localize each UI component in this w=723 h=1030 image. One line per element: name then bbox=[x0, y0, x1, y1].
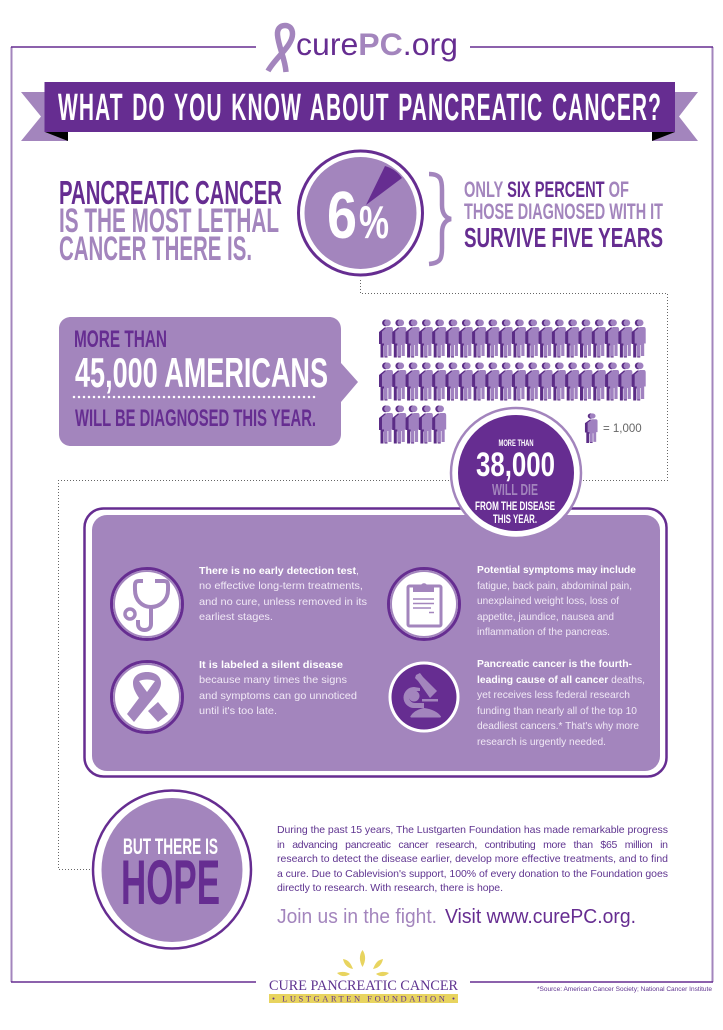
text: silent disease: because many times the signs bbox=[199, 674, 347, 686]
45,000 americans: 45,000 AMERICANS bbox=[75, 349, 328, 396]
text: fourth-leading cause: yet receives less federal research bbox=[477, 689, 630, 701]
foundation paragraph bbox=[277, 824, 668, 894]
45,000 callout bbox=[59, 317, 358, 446]
icon: stethoscope bbox=[112, 568, 182, 640]
text: potential symptoms: inflammation of the pancreas. bbox=[477, 626, 610, 638]
survival statement bbox=[464, 177, 663, 253]
text: fourth-leading cause: funding than nearly all of the top 10 bbox=[477, 705, 637, 717]
but there is: BUT THERE IS bbox=[123, 834, 218, 859]
hope: HOPE bbox=[121, 848, 220, 918]
icon: awareness ribbon logo bbox=[268, 26, 292, 72]
wordmark: CURE PANCREATIC CANCER bbox=[269, 978, 458, 994]
text: no early detection: There is no early detection test, bbox=[199, 565, 359, 577]
text: fourth-leading cause: Pancreatic cancer is the fourth- bbox=[477, 658, 632, 670]
text: silent disease: until it's too late. bbox=[199, 705, 277, 717]
text: fourth-leading cause: leading cause of all cancer deaths, bbox=[477, 674, 645, 686]
banner bar bbox=[44, 82, 675, 132]
pie wedge bbox=[366, 166, 402, 205]
text: fourth-leading cause bbox=[477, 658, 645, 748]
hope circle bbox=[93, 790, 251, 948]
text: potential symptoms: Potential symptoms may include bbox=[477, 564, 636, 576]
microscope arm bbox=[404, 687, 424, 708]
more than: MORE THAN bbox=[74, 326, 167, 353]
cure pancreatic cancer logo bbox=[269, 950, 458, 1004]
survival statement: ONLY SIX PERCENT OF bbox=[464, 177, 629, 202]
pictogram legend: = 1,000 bbox=[603, 423, 642, 435]
text: no early detection: earliest stages. bbox=[199, 611, 273, 623]
text: fourth-leading cause: deadliest cancers.* That's why more bbox=[477, 720, 639, 732]
text: no early detection: no effective long-term treatments, bbox=[199, 580, 363, 592]
diagnosed text: WILL BE DIAGNOSED THIS YEAR. bbox=[75, 405, 316, 432]
brace bbox=[429, 174, 451, 264]
lethal statement bbox=[59, 174, 282, 268]
title banner bbox=[21, 82, 698, 141]
foundation paragraph: During the past 15 years, The Lustgarten Foundation has made remarkable progress bbox=[277, 824, 668, 836]
call to action: Visit www.curePC.org. bbox=[445, 906, 636, 928]
foundation paragraph: research to detect the disease earlier, develop more effective treatments, and to find bbox=[277, 853, 668, 865]
pictogram legend bbox=[585, 413, 642, 443]
content panel bbox=[84, 508, 666, 776]
text: potential symptoms: fatigue, back pain, abdominal pain, bbox=[477, 580, 632, 592]
icon: leaves bbox=[337, 950, 389, 976]
pictogram: people, each = 1,000 bbox=[379, 320, 646, 444]
lustgarten foundation: • LUSTGARTEN FOUNDATION • bbox=[272, 994, 455, 1004]
speech bubble bbox=[59, 317, 358, 446]
ribbon folds bbox=[45, 132, 675, 141]
text: fourth-leading cause: research is urgently needed. bbox=[477, 736, 606, 748]
more than: MORE THAN bbox=[498, 438, 534, 448]
this year: THIS YEAR. bbox=[493, 514, 537, 526]
microscope stage bbox=[422, 699, 438, 702]
lethal statement: CANCER THERE IS. bbox=[59, 230, 252, 268]
38,000 circle bbox=[451, 408, 581, 538]
foundation paragraph: in advancing pancreatic cancer research, contributing more than $65 million in bbox=[277, 839, 668, 851]
text: potential symptoms bbox=[477, 564, 636, 638]
text: potential symptoms: unexplained weight loss, loss of bbox=[477, 595, 619, 607]
icon: ribbon bbox=[112, 662, 182, 732]
call to action bbox=[277, 906, 636, 928]
microscope base bbox=[410, 708, 441, 718]
yellow bar bbox=[269, 994, 458, 1003]
icon: microscope bbox=[388, 660, 460, 734]
text: silent disease bbox=[199, 659, 357, 717]
text: no early detection bbox=[199, 565, 367, 623]
will die: WILL DIE bbox=[492, 482, 538, 499]
38,000: 38,000 bbox=[476, 446, 555, 484]
percent sign: % bbox=[359, 196, 389, 248]
text: no early detection: and no cure, unless removed in its bbox=[199, 596, 367, 608]
6: 6 bbox=[327, 178, 357, 253]
source note: *Source: American Cancer Society; National Cancer Institute bbox=[537, 986, 712, 993]
logo wordmark: curePC.org bbox=[296, 26, 458, 62]
6% pie circle bbox=[298, 151, 422, 275]
from the disease: FROM THE DISEASE bbox=[475, 501, 555, 513]
text: potential symptoms: appetite, jaundice, nausea and bbox=[477, 611, 614, 623]
call to action: Join us in the fight. bbox=[277, 906, 437, 928]
text: silent disease: It is labeled a silent disease bbox=[199, 659, 343, 671]
ribbon tails bbox=[21, 92, 698, 141]
icon: clipboard bbox=[388, 568, 460, 640]
foundation paragraph: a cure. Due to Cablevision's support, 100% of every donation to the Foundation goes bbox=[277, 868, 668, 880]
foundation paragraph: directly to research. With research, there is hope. bbox=[277, 882, 503, 894]
text: silent disease: and symptoms can go unnoticed bbox=[199, 690, 357, 702]
lethal statement: IS THE MOST LETHAL bbox=[59, 202, 279, 240]
lethal statement: PANCREATIC CANCER bbox=[59, 174, 282, 211]
dotted connector bbox=[58, 280, 668, 870]
microscope tube bbox=[415, 673, 437, 698]
logo: curePC.org bbox=[268, 26, 458, 72]
